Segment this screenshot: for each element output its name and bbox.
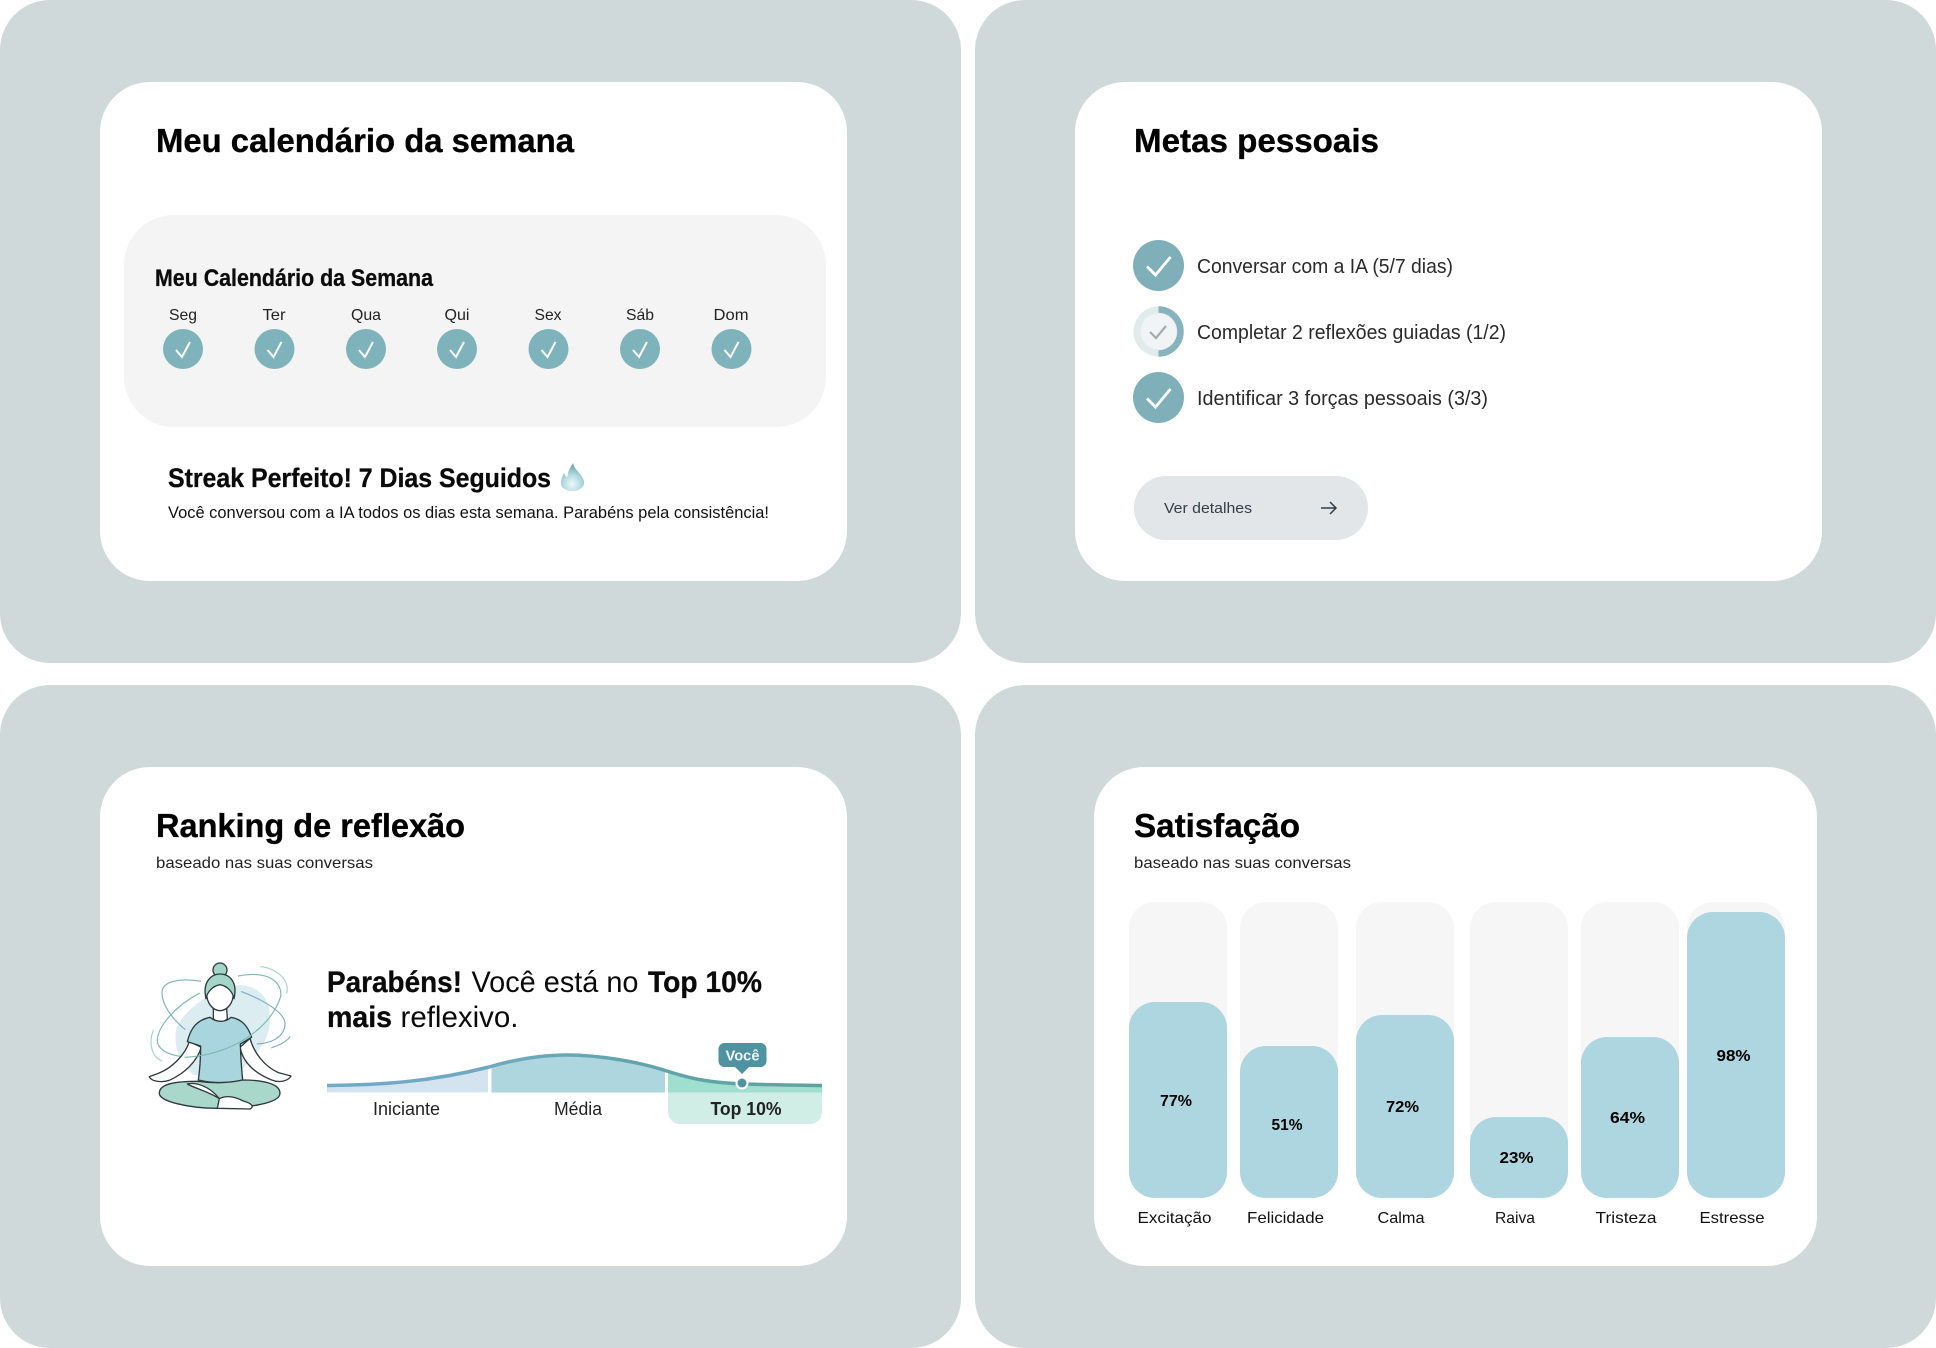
bar: Calma [1356, 902, 1454, 1227]
button: ver detalhes: Ver detalhes [1164, 500, 1252, 517]
icon: arrow [1321, 502, 1336, 514]
day: Qua: Qua [351, 307, 381, 324]
heading: goals: Metas pessoais [1134, 122, 1379, 159]
bar: Estresse: 98% [1716, 1048, 1750, 1065]
bar: Raiva [1470, 902, 1568, 1227]
bar: Calma: Calma [1378, 1210, 1425, 1227]
day: Seg: Seg [169, 307, 197, 324]
bar: Excitação: 77% [1160, 1093, 1192, 1110]
day: Qui [437, 307, 477, 369]
top 10 highlight box [668, 1092, 822, 1124]
day: Qua [346, 307, 386, 369]
bar: Felicidade: Felicidade [1247, 1210, 1324, 1227]
bar: Tristeza: 64% [1610, 1110, 1645, 1127]
illustration: meditating person [149, 963, 291, 1109]
congratulation message: reflexivo. [400, 1001, 518, 1034]
heading: calendar: Meu calendário da semana [156, 122, 575, 159]
bar: Tristeza: Tristeza [1596, 1210, 1657, 1227]
bar: Excitação [1129, 902, 1227, 1227]
day: Sáb [620, 307, 660, 369]
goal 1: Conversar com a IA (5/7 dias) [1197, 256, 1453, 278]
distribution chart [327, 1043, 822, 1124]
day: Dom: Dom [714, 307, 748, 324]
bar: Excitação: Excitação [1138, 1210, 1212, 1227]
marker: você: Você [726, 1048, 760, 1064]
panel: personal goals [975, 0, 1936, 663]
subheading: ranking: baseado nas suas conversas [156, 855, 373, 872]
goal 2: Completar 2 reflexões guiadas (1/2) [1197, 322, 1506, 344]
bar: Raiva: 23% [1500, 1150, 1534, 1167]
congratulation message: Parabéns! [327, 966, 462, 999]
label: Iniciante: Iniciante [373, 1099, 440, 1119]
day: Sex [528, 307, 568, 369]
label: Média: Média [554, 1099, 603, 1119]
goal 3 [1133, 372, 1488, 423]
bar: Estresse [1687, 902, 1785, 1227]
calendar box [124, 215, 826, 427]
day: Ter [254, 307, 294, 369]
panel: satisfaction [975, 685, 1936, 1348]
day: Ter: Ter [262, 307, 286, 324]
subheading: satisfaction: baseado nas suas conversas [1134, 855, 1351, 872]
label: Top 10%: Top 10% [710, 1099, 782, 1119]
calendar box title: Meu Calendário da Semana [155, 265, 434, 292]
heading: satisfaction: Satisfação [1134, 807, 1300, 844]
heading: ranking: Ranking de reflexão [156, 807, 465, 844]
streak message: Você conversou com a IA todos os dias esta semana. Parabéns pela consistência! [168, 503, 769, 522]
congratulation message [327, 966, 762, 1034]
bar: Tristeza [1581, 902, 1679, 1227]
bar: Calma: 72% [1386, 1099, 1419, 1116]
congratulation message: Você está no [472, 966, 638, 999]
congratulation message: Top 10% [648, 966, 762, 999]
day: Sex: Sex [534, 307, 562, 324]
bar: Raiva: Raiva [1495, 1210, 1535, 1227]
marker: você [718, 1043, 766, 1088]
goal 1 [1133, 240, 1453, 291]
bar: Felicidade: 51% [1272, 1117, 1302, 1134]
congratulation message: mais [327, 1001, 392, 1034]
button: ver detalhes [1134, 476, 1368, 540]
bar chart [1129, 902, 1785, 1227]
day: Dom [712, 307, 752, 369]
goal 3: Identificar 3 forças pessoais (3/3) [1197, 388, 1488, 410]
day: Seg [163, 307, 203, 369]
day: Qui: Qui [444, 307, 470, 324]
icon: flame [561, 463, 584, 491]
bar: Felicidade [1240, 902, 1338, 1227]
bar: Estresse: Estresse [1700, 1210, 1765, 1227]
panel: weekly calendar [0, 0, 961, 663]
arms [149, 1038, 291, 1082]
goal 2 [1134, 306, 1506, 356]
panel: reflection ranking [0, 685, 961, 1348]
streak heading: Streak Perfeito! 7 Dias Seguidos [168, 463, 551, 493]
day: Sáb: Sáb [626, 307, 654, 324]
